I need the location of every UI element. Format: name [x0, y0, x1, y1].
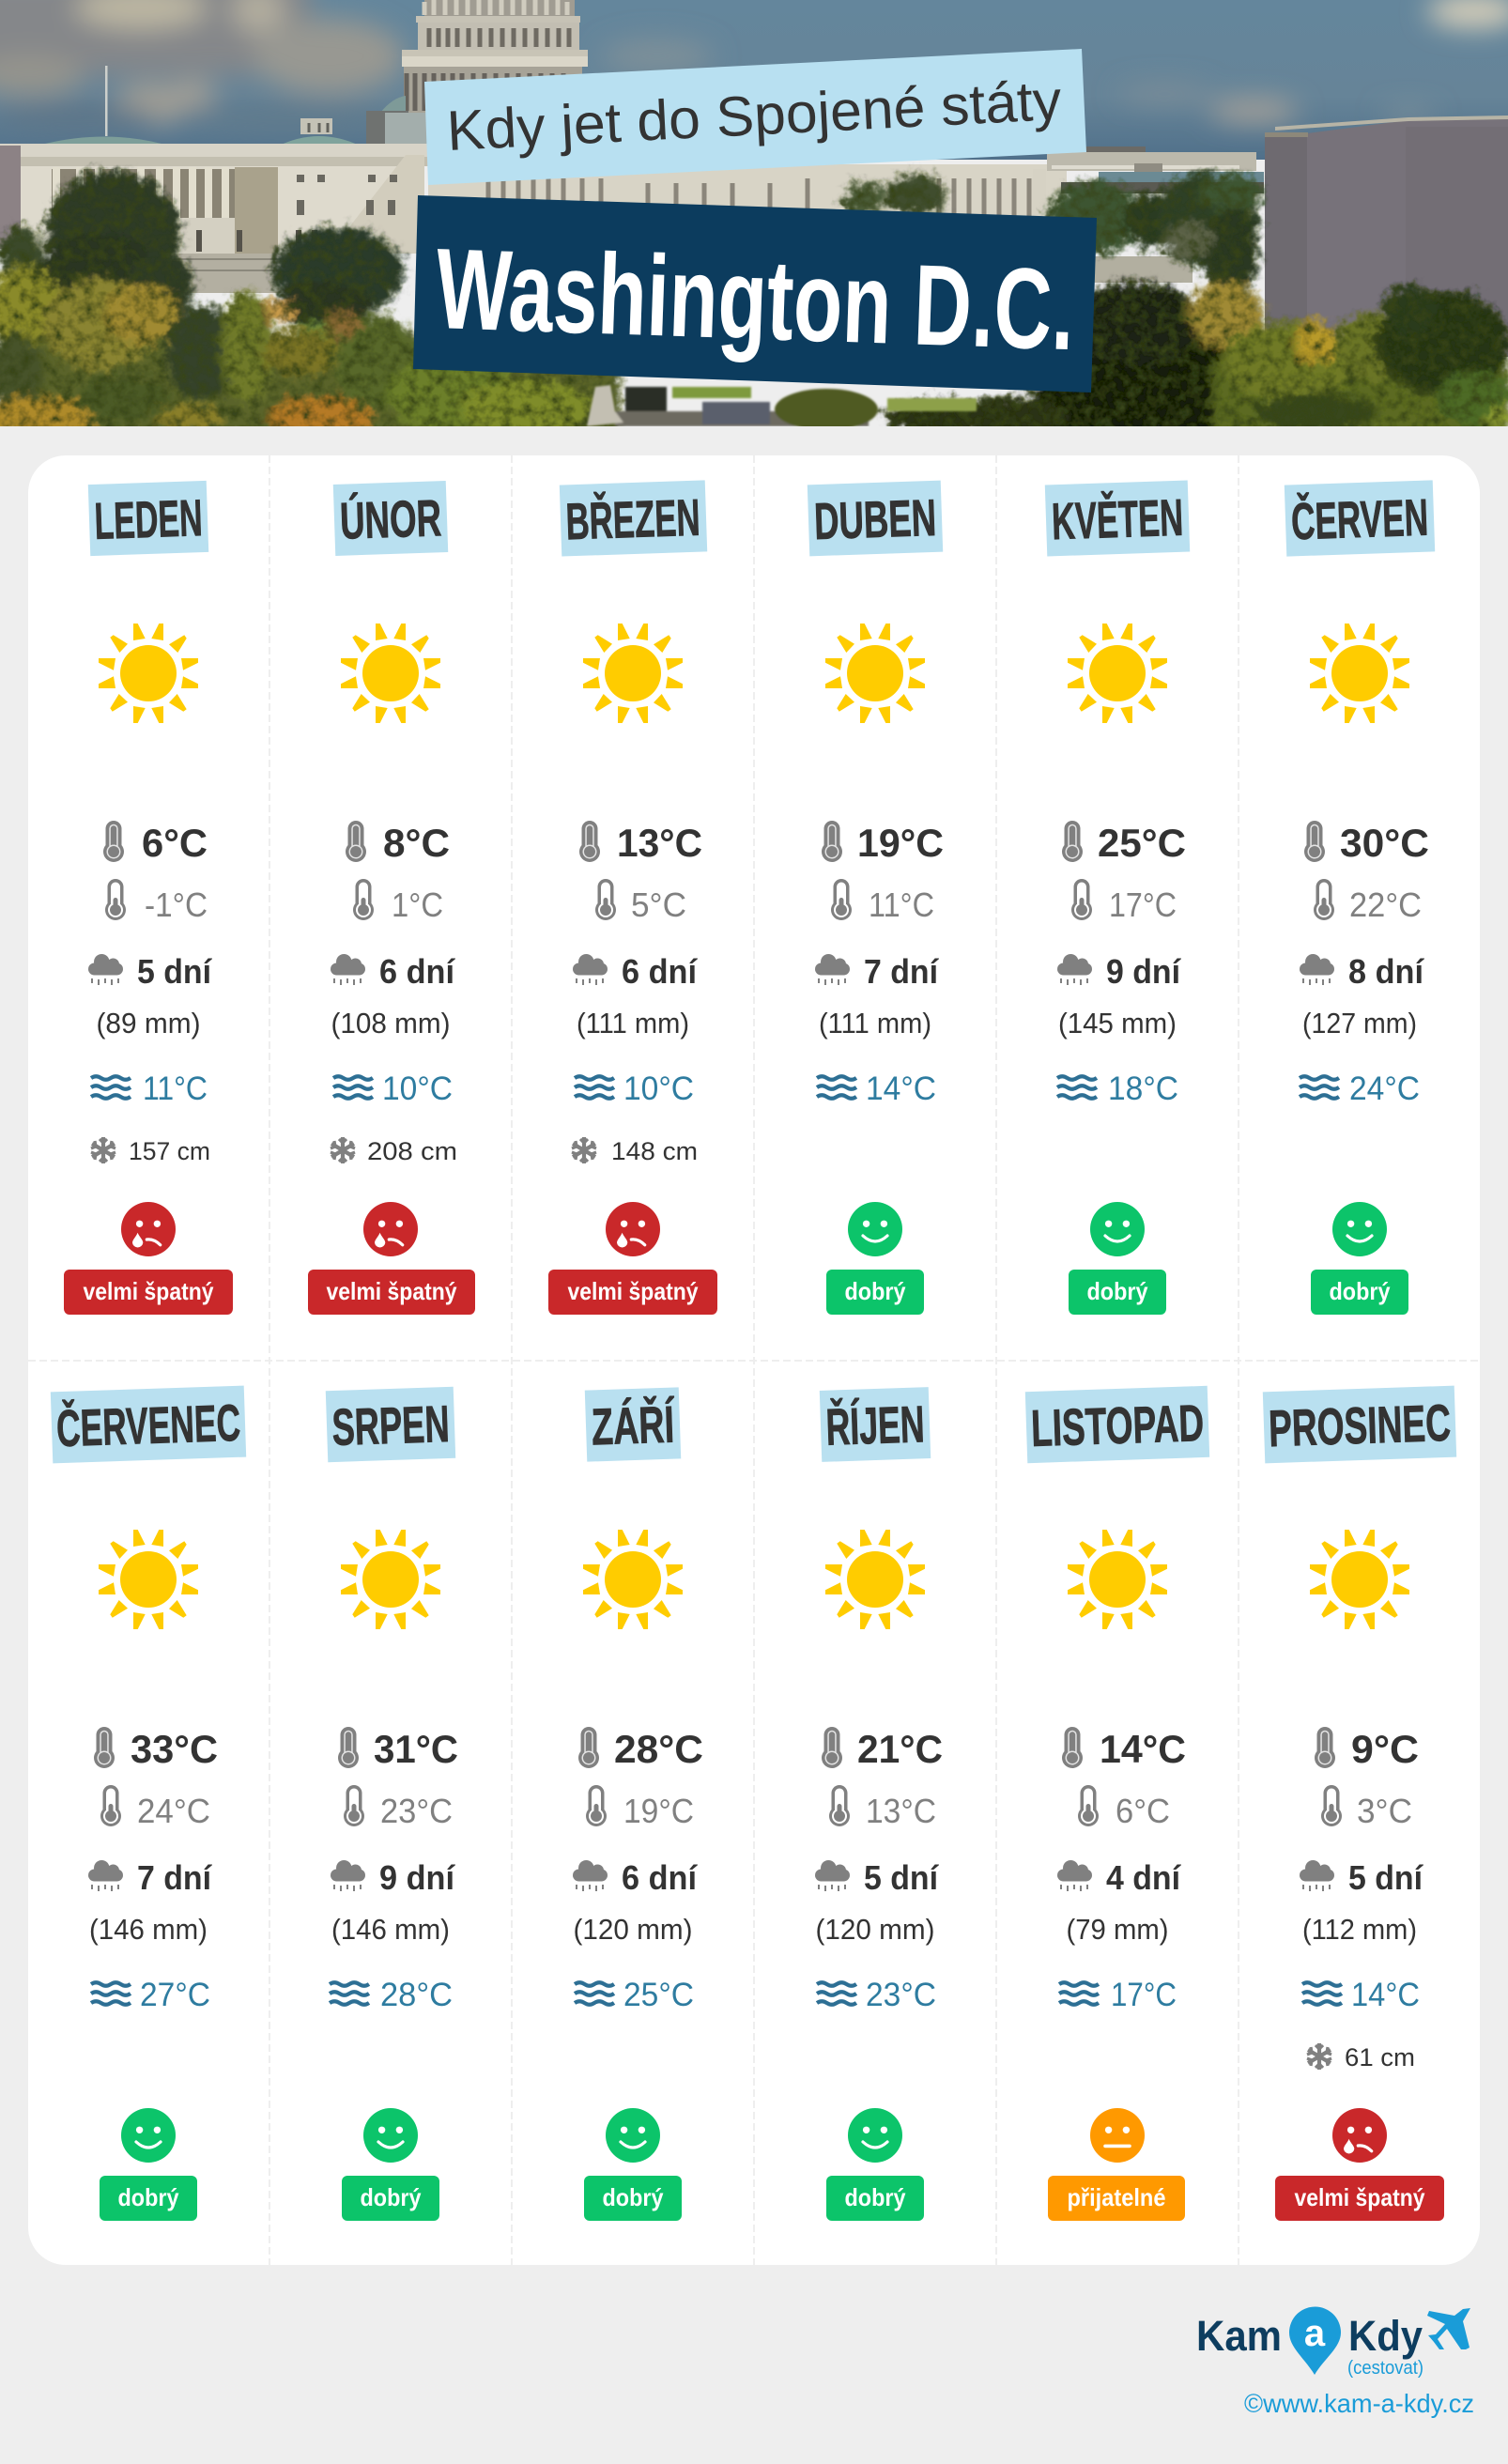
rating badge: velmi špatný	[567, 1277, 699, 1305]
rain days	[815, 952, 939, 991]
snowfall	[1307, 2043, 1415, 2071]
low temperature: 5°C	[631, 886, 686, 924]
rating badge: dobrý	[845, 1277, 906, 1305]
water temperature	[1300, 1070, 1420, 1107]
snowfall	[331, 1137, 457, 1165]
high temperature	[103, 821, 208, 865]
month heading: LEDEN	[94, 488, 204, 550]
rainfall: (79 mm)	[1067, 1913, 1168, 1946]
rating badge: přijatelné	[1067, 2183, 1166, 2211]
low temperature	[100, 1785, 210, 1830]
low temperature: 6°C	[1116, 1792, 1170, 1830]
month heading	[1285, 480, 1435, 557]
water temperature: 11°C	[143, 1070, 208, 1107]
month heading	[585, 1387, 681, 1462]
high temperature	[1062, 1727, 1186, 1771]
rainfall: (146 mm)	[331, 1913, 450, 1946]
rain days: 6 dní	[622, 1858, 698, 1897]
low temperature: 11°C	[869, 886, 934, 924]
water temperature	[817, 1977, 936, 2013]
panel: BŘEZEN	[548, 480, 717, 1315]
month heading: ČERVEN	[1290, 488, 1429, 550]
rating icon: good	[121, 2108, 176, 2163]
rating icon: very bad	[1332, 2108, 1387, 2163]
header title banner	[413, 195, 1097, 393]
rainfall: (89 mm)	[96, 1007, 201, 1040]
rain days	[1057, 1858, 1181, 1897]
high temperature	[579, 821, 702, 865]
header subtitle banner	[424, 49, 1086, 185]
low temperature	[344, 1785, 453, 1830]
high temperature: 28°C	[614, 1727, 703, 1771]
water temperature: 17°C	[1111, 1977, 1177, 2013]
rain days	[331, 1858, 455, 1897]
rain days: 5 dní	[864, 1858, 939, 1897]
water temperature	[91, 1977, 210, 2013]
water temperature: 10°C	[382, 1070, 453, 1107]
rainfall: (111 mm)	[577, 1007, 689, 1040]
month heading: ÚNOR	[339, 488, 442, 550]
low temperature: 13°C	[866, 1792, 936, 1830]
rain days: 7 dní	[137, 1858, 212, 1897]
icon: map pin	[1289, 2306, 1341, 2375]
month heading: ZÁŘÍ	[591, 1395, 676, 1455]
rainfall: (108 mm)	[331, 1007, 451, 1040]
main title text: Washington D.C.	[434, 224, 1076, 374]
month heading: ŘÍJEN	[825, 1394, 926, 1456]
high temperature: 8°C	[383, 821, 450, 865]
logo: Kam a Kdy: Kam	[1196, 2312, 1282, 2360]
rating badge: dobrý	[603, 2183, 664, 2211]
rain days	[1057, 952, 1181, 991]
rating icon: good	[1332, 1202, 1387, 1256]
icon: sun	[1068, 1530, 1167, 1629]
rating icon: good	[1090, 1202, 1145, 1256]
icon: sun	[583, 1530, 683, 1629]
low temperature	[1078, 1785, 1170, 1830]
low temperature	[586, 1785, 694, 1830]
rainfall: (120 mm)	[815, 1913, 935, 1946]
snowfall: 157 cm	[129, 1137, 210, 1165]
rainfall: (127 mm)	[1302, 1007, 1417, 1040]
water temperature: 14°C	[1351, 1977, 1420, 2013]
rating badge	[342, 2176, 439, 2221]
month heading: SRPEN	[331, 1394, 451, 1456]
month heading	[808, 481, 943, 556]
snowfall: 61 cm	[1345, 2043, 1415, 2071]
icon: sun	[341, 1530, 440, 1629]
rainfall: (112 mm)	[1302, 1913, 1417, 1946]
icon: sun	[583, 624, 683, 723]
high temperature	[822, 1727, 943, 1771]
month heading	[1045, 481, 1190, 556]
panel: ČERVEN	[1285, 480, 1435, 1315]
water temperature: 14°C	[866, 1070, 936, 1107]
rating icon: good	[363, 2108, 418, 2163]
snowfall	[91, 1137, 210, 1165]
trees	[0, 171, 1508, 439]
low temperature	[595, 879, 686, 924]
low temperature: 22°C	[1349, 886, 1422, 924]
low temperature: 17°C	[1109, 886, 1177, 924]
rainfall: (111 mm)	[819, 1007, 931, 1040]
panel: KVĚTEN	[1045, 481, 1190, 1315]
panel: ŘÍJEN	[815, 1387, 943, 2221]
month heading	[820, 1387, 931, 1462]
water temperature	[330, 1977, 453, 2013]
high temperature	[346, 821, 450, 865]
water temperature	[575, 1070, 694, 1107]
panel: ZÁŘÍ	[573, 1387, 703, 2221]
rating badge	[826, 1270, 924, 1315]
snowfall	[572, 1137, 698, 1165]
rating badge	[64, 1270, 233, 1315]
month heading: ČERVENEC	[55, 1394, 241, 1457]
water temperature: 27°C	[140, 1977, 210, 2013]
month heading: DUBEN	[813, 488, 937, 550]
low temperature: 23°C	[380, 1792, 453, 1830]
high temperature: 14°C	[1100, 1727, 1186, 1771]
low temperature: 3°C	[1357, 1792, 1412, 1830]
water temperature	[575, 1977, 694, 2013]
rain days	[573, 1858, 698, 1897]
rating badge: dobrý	[845, 2183, 906, 2211]
rain days: 5 dní	[137, 952, 212, 991]
logo: Kam a Kdy: Kdy	[1348, 2312, 1423, 2360]
header photo: Capitol building and trees	[0, 0, 1508, 439]
rating badge	[548, 1270, 717, 1315]
icon: sun	[1310, 1530, 1409, 1629]
rain days	[1300, 1858, 1423, 1897]
low temperature	[353, 879, 443, 924]
rating icon: very bad	[606, 1202, 660, 1256]
rating icon: good	[848, 2108, 902, 2163]
snowfall: 208 cm	[367, 1137, 457, 1165]
high temperature: 33°C	[131, 1727, 218, 1771]
high temperature: 13°C	[617, 821, 702, 865]
rain days	[88, 1858, 212, 1897]
rating badge	[1048, 2176, 1185, 2221]
rain days: 5 dní	[1348, 1858, 1423, 1897]
water temperature: 24°C	[1349, 1070, 1420, 1107]
icon: sun	[825, 624, 925, 723]
high temperature	[822, 821, 944, 865]
rain days: 7 dní	[864, 952, 939, 991]
rating icon: acceptable	[1090, 2108, 1145, 2163]
rating icon: very bad	[121, 1202, 176, 1256]
rating badge: dobrý	[118, 2183, 179, 2211]
rating badge	[1069, 1270, 1166, 1315]
icon: sun	[825, 1530, 925, 1629]
Capitol dome	[366, 0, 588, 146]
month heading	[333, 481, 448, 556]
month heading: KVĚTEN	[1051, 488, 1184, 550]
month heading	[51, 1386, 246, 1463]
right concrete building	[1265, 116, 1508, 357]
rain days: 8 dní	[1348, 952, 1424, 991]
rating badge	[308, 1270, 475, 1315]
subtitle text: Kdy jet do Spojené státy	[445, 69, 1063, 162]
rating icon: very bad	[363, 1202, 418, 1256]
month heading: BŘEZEN	[565, 488, 701, 550]
water temperature	[1059, 1977, 1177, 2013]
rain days	[331, 952, 455, 991]
rain days	[88, 952, 212, 991]
icon: sun	[1068, 624, 1167, 723]
rating badge: dobrý	[1330, 1277, 1391, 1305]
rating badge: velmi špatný	[1294, 2183, 1425, 2211]
high temperature: 31°C	[374, 1727, 458, 1771]
low temperature: -1°C	[145, 886, 208, 924]
high temperature: 6°C	[142, 821, 208, 865]
panel: LEDEN	[64, 481, 233, 1315]
icon: sun	[99, 624, 198, 723]
panel: ÚNOR	[308, 481, 475, 1315]
panel: PROSINEC	[1263, 1386, 1456, 2221]
water temperature: 10°C	[623, 1070, 694, 1107]
rating badge: dobrý	[1087, 1277, 1148, 1305]
low temperature	[831, 879, 934, 924]
high temperature: 9°C	[1351, 1727, 1419, 1771]
water temperature: 18°C	[1108, 1070, 1178, 1107]
rain days: 6 dní	[622, 952, 698, 991]
rating badge	[100, 2176, 197, 2221]
high temperature: 19°C	[857, 821, 944, 865]
rating icon: good	[848, 1202, 902, 1256]
water temperature	[1302, 1977, 1420, 2013]
rain days: 9 dní	[1106, 952, 1181, 991]
icon: map pin: a	[1304, 2313, 1326, 2354]
month heading	[326, 1387, 455, 1462]
high temperature: 21°C	[857, 1727, 943, 1771]
water temperature	[817, 1070, 936, 1107]
rain days	[573, 952, 698, 991]
rating badge: velmi špatný	[327, 1277, 457, 1305]
rain days: 6 dní	[379, 952, 455, 991]
rating badge	[826, 2176, 924, 2221]
month heading	[88, 481, 208, 556]
rain days: 4 dní	[1106, 1858, 1181, 1897]
month heading	[1263, 1386, 1456, 1463]
rating badge	[1275, 2176, 1444, 2221]
water temperature	[91, 1070, 208, 1107]
water temperature	[333, 1070, 453, 1107]
low temperature	[1071, 879, 1177, 924]
rating icon: good	[606, 2108, 660, 2163]
month heading: LISTOPAD	[1030, 1394, 1205, 1457]
water temperature: 28°C	[380, 1977, 453, 2013]
left wing of the Capitol	[0, 66, 428, 293]
low temperature: 24°C	[137, 1792, 210, 1830]
main white card	[28, 455, 1480, 2265]
low temperature	[105, 879, 208, 924]
panel: ČERVENEC	[51, 1386, 246, 2221]
copyright link: ©www.kam-a-kdy.cz	[1244, 2389, 1474, 2418]
high temperature	[1315, 1727, 1419, 1771]
rain days: 9 dní	[379, 1858, 455, 1897]
high temperature: 25°C	[1098, 821, 1186, 865]
low temperature	[1321, 1785, 1412, 1830]
high temperature	[338, 1727, 458, 1771]
water temperature: 25°C	[623, 1977, 694, 2013]
rating badge: velmi špatný	[83, 1277, 214, 1305]
icon: airplane	[1427, 2308, 1470, 2349]
water temperature	[1057, 1070, 1178, 1107]
rainfall: (120 mm)	[573, 1913, 693, 1946]
rating badge	[584, 2176, 682, 2221]
logo: Kam a Kdy	[1196, 2306, 1470, 2379]
icon: sun	[99, 1530, 198, 1629]
low temperature: 1°C	[392, 886, 443, 924]
panel: LISTOPAD	[1025, 1386, 1209, 2221]
month heading	[560, 480, 707, 557]
low temperature	[1314, 879, 1422, 924]
panel: SRPEN	[326, 1387, 458, 2221]
high temperature: 30°C	[1340, 821, 1429, 865]
month heading	[1025, 1386, 1209, 1463]
low temperature	[829, 1785, 936, 1830]
icon: sun	[341, 624, 440, 723]
central building behind the title	[428, 146, 1264, 283]
rating badge	[1311, 1270, 1408, 1315]
snowfall: 148 cm	[611, 1137, 698, 1165]
rainfall: (146 mm)	[89, 1913, 208, 1946]
rain days	[815, 1858, 939, 1897]
low temperature: 19°C	[623, 1792, 694, 1830]
street and monument	[587, 385, 977, 430]
panel: DUBEN	[808, 481, 944, 1315]
rain days	[1300, 952, 1424, 991]
rating badge: dobrý	[361, 2183, 422, 2211]
logo: Kam a Kdy: (cestovat)	[1347, 2358, 1423, 2379]
rainfall: (145 mm)	[1058, 1007, 1177, 1040]
icon: sun	[1310, 624, 1409, 723]
water temperature: 23°C	[866, 1977, 936, 2013]
